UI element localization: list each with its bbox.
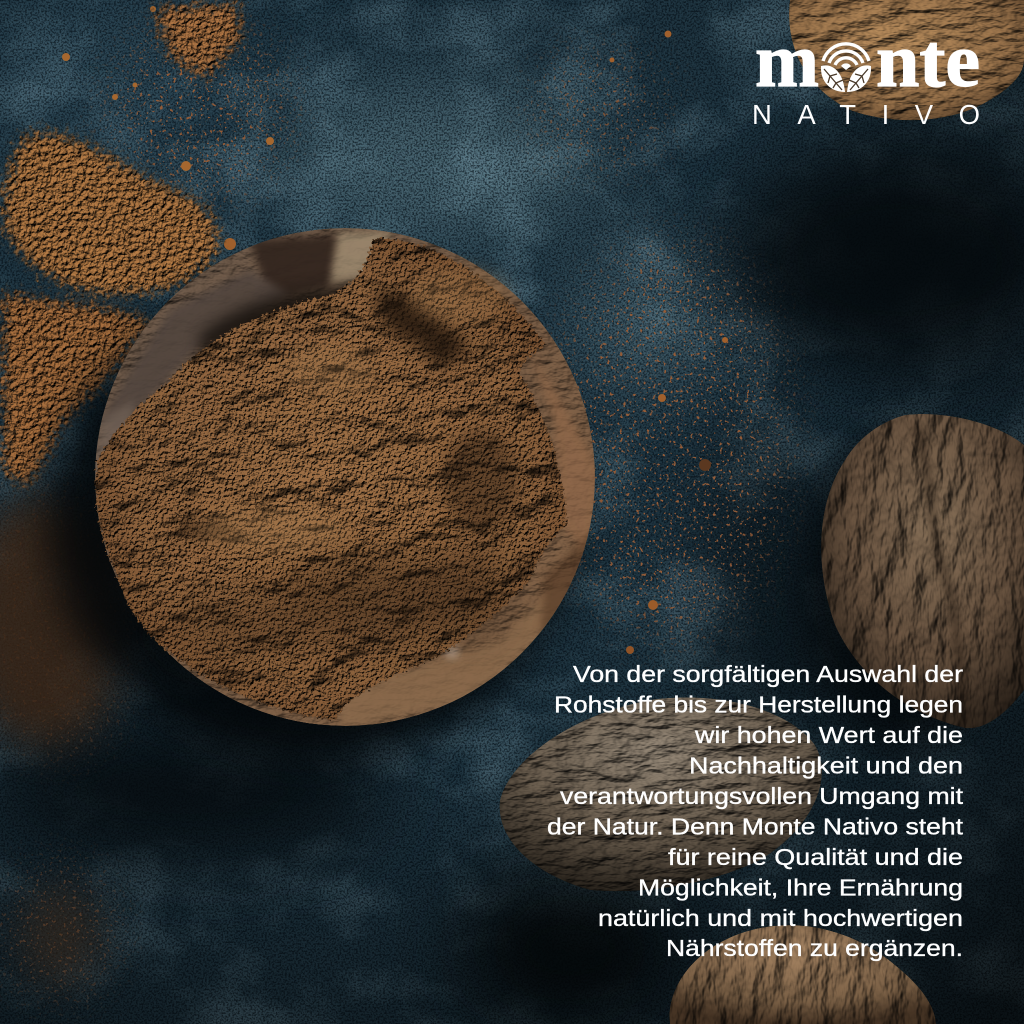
body text: Nachhaltigkeit und den (689, 752, 963, 778)
logo wordmark: monte (755, 19, 980, 103)
bowl inner shadow (200, 286, 470, 370)
logo wordmark: monte: nte (876, 19, 980, 103)
spice heap: dim powder in shadow (0, 495, 130, 745)
body text: wir hohen Wert auf die (694, 722, 963, 748)
powder highlights (195, 267, 510, 552)
bowl (92, 228, 600, 730)
body text: der Natur. Denn Monte Nativo steht (547, 814, 964, 840)
shadow beneath bowl (48, 290, 572, 760)
body text: Nährstoffen zu ergänzen. (666, 935, 963, 961)
spice heap: upper left (1, 130, 220, 297)
body text: Rohstoffe bis zur Herstellung legen (554, 692, 963, 718)
bowl rim (92, 228, 600, 730)
body text: natürlich und mit hochwertigen (598, 905, 963, 931)
nutmeg: centre (500, 697, 822, 891)
nutmeg: bottom (670, 925, 936, 1024)
body text: Von der sorgfältigen Auswahl der (573, 661, 963, 687)
ground spice in bowl (96, 238, 567, 720)
spice heap: top (150, 0, 245, 82)
spice heap: left (0, 290, 155, 488)
body text: verantwortungsvollen Umgang mit (560, 783, 964, 809)
logo subline: NATIVO: NATIVO (752, 99, 980, 130)
scattered spice specks (0, 6, 790, 1000)
spice heap: lower left (20, 885, 100, 985)
logo: Monte Nativo (752, 19, 980, 130)
body text: für reine Qualität und die (668, 844, 963, 870)
body text: Möglichkeit, Ihre Ernährung (638, 874, 963, 900)
nutmeg: right (821, 414, 1024, 728)
logo icon: circle of arcs and leaves (821, 44, 871, 92)
powder shadows (170, 290, 518, 653)
logo wordmark: monte: m (755, 19, 819, 103)
body text (547, 661, 964, 961)
nutmeg shadow right (800, 430, 1010, 750)
nutmeg: top right (789, 0, 1024, 120)
